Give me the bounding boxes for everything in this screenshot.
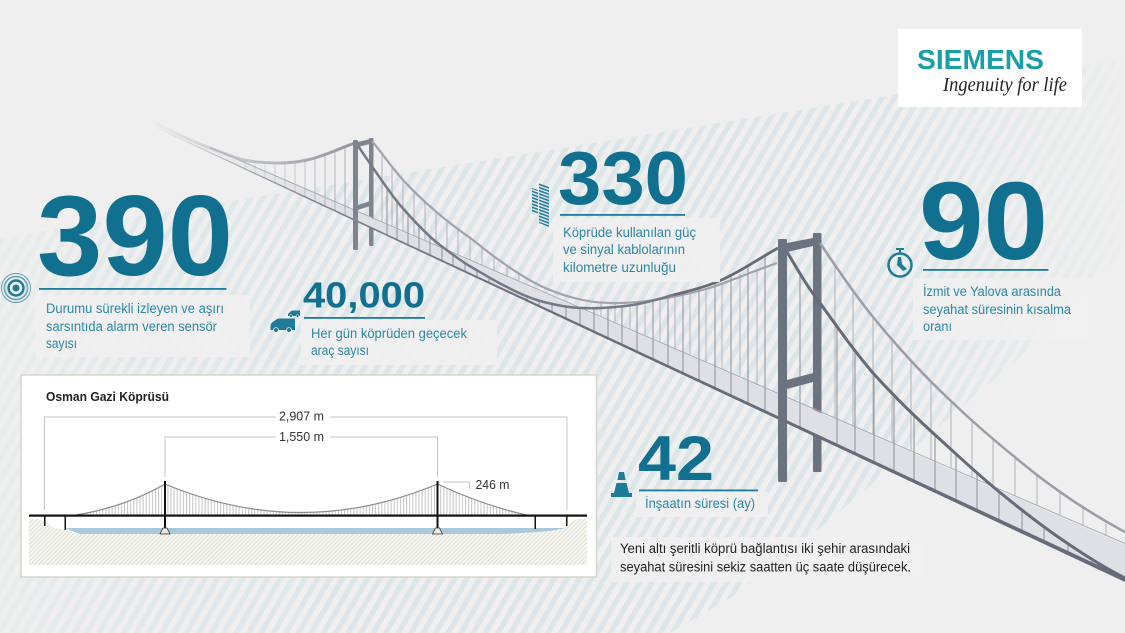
stat: 40,000 vehicles <box>270 274 497 365</box>
far tower back leg <box>369 138 374 246</box>
bridge illustration <box>150 120 1125 582</box>
diagonal striped background band <box>28 94 1048 633</box>
logo: Siemens <box>898 29 1082 107</box>
caption: İnşaatın süresi (ay) <box>645 496 755 511</box>
caption: Köprüde kullanılan güç <box>563 225 696 240</box>
icon: stopwatch <box>888 248 912 276</box>
stat: 390 sensors <box>2 173 250 357</box>
icon: traffic cone <box>611 472 632 497</box>
far side hangers <box>245 146 345 216</box>
light main cable <box>150 120 355 163</box>
text backing <box>913 278 1095 340</box>
number: 330 <box>558 136 688 220</box>
caption: Her gün köprüden geçecek <box>311 326 467 341</box>
caption: sarsıntıda alarm veren sensör <box>46 319 217 334</box>
text backing <box>553 218 720 282</box>
number: 90 <box>919 160 1048 283</box>
caption: İzmit ve Yalova arasında <box>923 284 1061 299</box>
dark main cable <box>358 146 673 308</box>
main cable <box>76 484 527 515</box>
deck and piers <box>29 481 587 531</box>
panel: bridge elevation diagram <box>21 375 596 577</box>
icon: sensor rings <box>2 274 30 302</box>
summary paragraph: seyahat süresini sekiz saatten üç saate düşürecek. <box>620 560 911 574</box>
rule <box>304 317 425 319</box>
far tower front leg and beams <box>353 139 370 250</box>
caption: seyahat süresinin kısalma <box>923 302 1071 317</box>
caption: sayısı <box>46 336 77 351</box>
dimension: main span: 1,550 m <box>279 429 324 444</box>
rule <box>39 288 226 290</box>
caption: kilometre uzunluğu <box>563 260 676 275</box>
tower foundations <box>160 528 442 534</box>
rule <box>923 269 1048 271</box>
caption <box>563 225 696 275</box>
number: 42 <box>638 424 714 494</box>
logo: Siemens: Ingenuity for life <box>942 74 1067 96</box>
stat: 330 km cables <box>532 136 720 282</box>
near hangers <box>387 187 1117 576</box>
stat: 90 travel time <box>888 160 1095 340</box>
dimension: tower height <box>443 477 510 492</box>
logo: Siemens: SIEMENS <box>917 44 1044 75</box>
diagram title: Osman Gazi Köprüsü <box>46 390 169 404</box>
summary paragraph <box>611 537 925 582</box>
rule <box>560 214 685 216</box>
caption: araç sayısı <box>311 343 369 358</box>
text backing <box>636 492 768 517</box>
caption: oranı <box>923 319 952 334</box>
deck upper edge <box>210 148 1125 544</box>
caption <box>46 301 224 351</box>
ground <box>29 519 587 565</box>
dimension: total length: 2,907 m <box>279 408 324 424</box>
icon: cable bundles <box>532 183 549 227</box>
dimension: main span <box>165 429 438 477</box>
near tower back leg <box>813 233 822 472</box>
caption <box>311 326 467 358</box>
text backing <box>35 295 250 357</box>
caption: ve sinyal kablolarının <box>563 242 685 257</box>
number: 390 <box>37 173 233 300</box>
near tower front leg and beams <box>778 238 813 482</box>
hangers <box>76 484 527 515</box>
rule <box>639 490 758 491</box>
caption: Durumu sürekli izleyen ve aşırı <box>46 301 224 316</box>
dimension: total length <box>44 408 567 510</box>
dimension: tower height: 246 m <box>476 477 510 492</box>
summary paragraph: Yeni altı şeritli köprü bağlantısı iki şehir arasındaki <box>620 541 910 556</box>
text backing <box>301 320 497 365</box>
bridge deck <box>150 122 1125 580</box>
icon: vehicles <box>270 310 300 332</box>
caption <box>923 284 1071 334</box>
deck lower edge <box>150 124 1125 582</box>
water <box>64 528 566 534</box>
stat: 42 months <box>611 424 768 517</box>
middle and side span hangers <box>382 154 1106 535</box>
number: 40,000 <box>303 274 425 316</box>
